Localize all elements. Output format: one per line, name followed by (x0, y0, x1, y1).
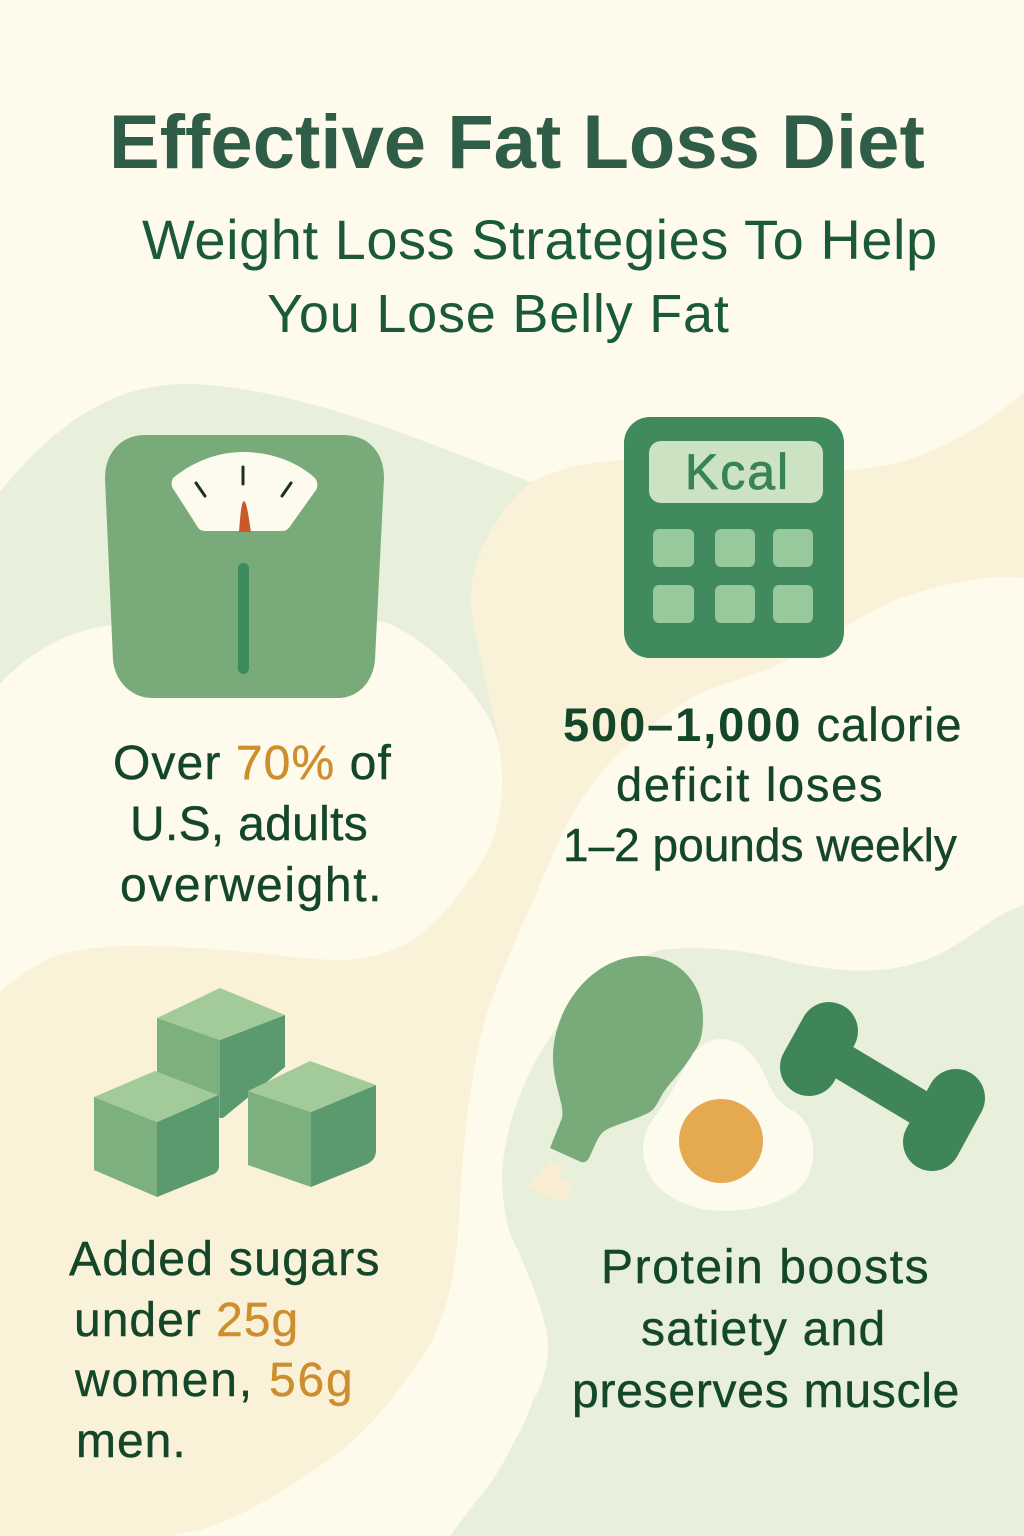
text: added sugars: women, 56g (75, 1354, 355, 1407)
subtitle: You Lose Belly Fat (267, 284, 730, 344)
text: added sugars (68, 1233, 381, 1468)
dumbbell (809, 1031, 956, 1142)
icon: sugar cubes (94, 988, 376, 1197)
text: overweight statistic: Over 70% of (113, 737, 392, 790)
text: calorie deficit: deficit loses (616, 758, 884, 811)
text: calorie deficit: 1–2 pounds weekly (563, 819, 957, 871)
icon: protein food and dumbbell (528, 956, 985, 1211)
text: added sugars: Added sugars (69, 1233, 381, 1286)
text: protein: satiety and (641, 1303, 886, 1356)
calculator keys (653, 529, 813, 623)
text: protein: preserves muscle (572, 1365, 960, 1418)
calculator display: Kcal (685, 444, 790, 500)
text: protein: Protein boosts (601, 1241, 930, 1294)
subtitle: Weight Loss Strategies To Help (142, 208, 938, 271)
icon: weighing scale (105, 435, 384, 698)
text: added sugars: men. (76, 1415, 187, 1468)
text: overweight statistic (113, 737, 392, 912)
text: overweight statistic: U.S, adults (130, 798, 368, 851)
text: added sugars: under 25g (74, 1294, 299, 1347)
text: overweight statistic: overweight. (120, 859, 383, 912)
title: Effective Fat Loss Diet (109, 100, 925, 185)
subtitle (142, 208, 938, 344)
chicken drumstick (528, 956, 703, 1203)
icon: calorie calculator (624, 417, 844, 658)
text: protein (572, 1241, 960, 1418)
text: calorie deficit: 500–1,000 calorie (563, 698, 963, 751)
fried egg (643, 1039, 813, 1211)
calculator display (649, 441, 823, 503)
text: calorie deficit (563, 698, 963, 871)
